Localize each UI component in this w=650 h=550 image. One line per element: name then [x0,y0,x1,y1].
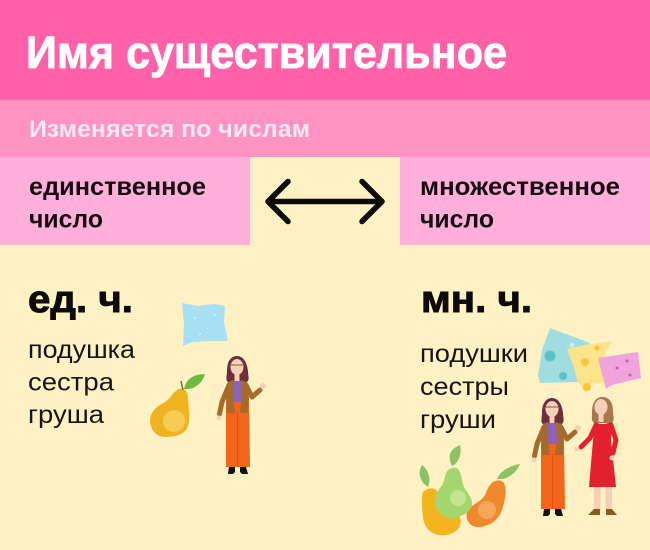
woman in red dress [574,397,617,515]
singular word list: груша [28,401,104,429]
plural word list [420,340,528,434]
plural word list: груши [420,406,496,434]
icon: two women [532,397,617,516]
heading: plural abbreviation: мн. ч. [421,279,532,321]
panel: singular heading: единственное [29,173,206,201]
heading: singular abbreviation: ед. ч. [28,279,133,321]
singular word list: подушка [28,336,135,364]
panel: plural heading [400,157,650,245]
green pear [435,468,472,518]
yellow pillow [567,341,612,393]
subtitle band: Изменяется по числам [29,116,310,143]
singular word list [28,336,135,429]
panel: singular heading [0,157,250,245]
icon: pear [150,374,205,437]
panel: plural heading: число [420,206,494,234]
title band [0,0,650,100]
woman in orange trousers [532,398,581,516]
pink pillow [598,352,641,389]
panel: singular heading: число [29,206,103,234]
blue pillow [538,328,590,383]
icon: three pears [420,445,520,535]
plural word list: сестры [420,373,509,401]
title band: Имя существительное [26,27,507,78]
plural word list: подушки [420,340,528,368]
singular word list: сестра [28,368,114,396]
orange pear [467,480,506,527]
panel: plural heading: множественное [420,173,620,201]
icon: pillow [182,303,228,346]
icon: woman in orange trousers [216,356,266,474]
arrow: double-headed [268,182,382,222]
subtitle band [0,100,650,157]
yellow pear [422,488,461,535]
icon: stack of pillows [538,328,641,393]
